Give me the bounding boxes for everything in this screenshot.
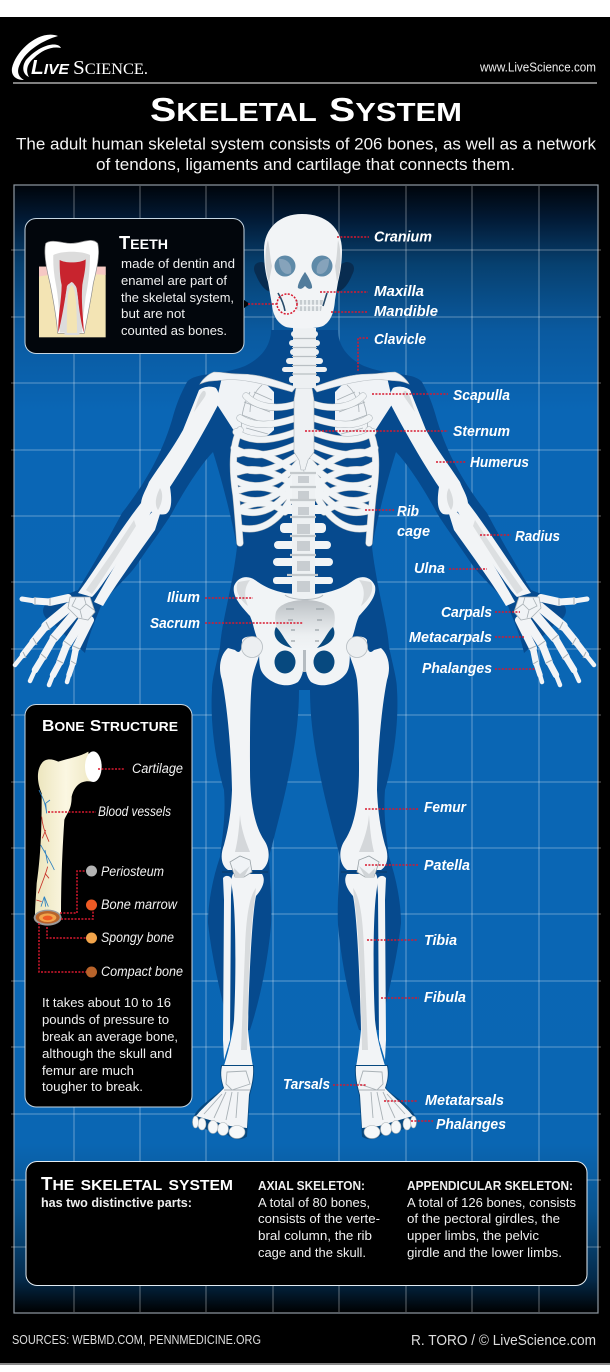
appendicular skeleton text: upper limbs, the pelvic xyxy=(407,1228,540,1243)
credit: R. TORO / © LiveScience.com xyxy=(411,1333,596,1349)
bone structure heading: Bone Structure xyxy=(42,715,178,735)
appendicular skeleton text: girdle and the lower limbs. xyxy=(407,1245,562,1260)
teeth body text: counted as bones. xyxy=(121,323,227,338)
bone illustration xyxy=(34,751,102,926)
bone pressure text: pounds of pressure to xyxy=(42,1012,169,1027)
teeth body text xyxy=(121,256,235,338)
axial skeleton text: consists of the verte- xyxy=(258,1211,380,1226)
bone labels: Sternum xyxy=(453,423,510,440)
axial skeleton text: cage and the skull. xyxy=(258,1245,366,1260)
bone labels: Clavicle xyxy=(374,331,426,348)
axial skeleton text xyxy=(258,1178,380,1260)
bone pressure text: femur are much xyxy=(42,1063,134,1078)
bone pressure text: break an average bone, xyxy=(42,1029,178,1044)
bone pressure text: although the skull and xyxy=(42,1046,172,1061)
teeth body text: enamel are part of xyxy=(121,273,227,288)
bone labels: Mandible xyxy=(374,303,438,320)
right half of skeleton xyxy=(304,372,594,1138)
tooth illustration xyxy=(39,240,106,337)
logo: LiveScience: SCIENCE. xyxy=(73,57,148,79)
teeth body text: the skeletal system, xyxy=(121,290,234,305)
bone labels: Patella xyxy=(424,857,470,874)
panel: bone structure xyxy=(25,704,192,1107)
bone part labels xyxy=(98,761,183,979)
intro text: of tendons, ligaments and cartilage that connects them. xyxy=(96,155,515,174)
bone labels: Phalanges xyxy=(436,1116,506,1133)
bone labels: Femur xyxy=(424,799,467,816)
axial skeleton text: AXIAL SKELETON: xyxy=(258,1178,365,1193)
bone part labels: Cartilage xyxy=(132,761,183,776)
teeth body text: but are not xyxy=(121,306,185,321)
panel: two distinctive parts xyxy=(26,1162,587,1286)
bone labels: cage xyxy=(397,523,430,540)
skeleton xyxy=(15,214,594,1138)
axial skeleton text: bral column, the rib xyxy=(258,1228,372,1243)
bone part labels: Bone marrow xyxy=(101,897,178,912)
sub heading: has two distinctive parts: xyxy=(41,1195,192,1210)
bone labels: Phalanges xyxy=(422,660,492,677)
website url: www.LiveScience.com xyxy=(479,60,596,74)
cervical spine xyxy=(282,328,327,388)
pelvic inlet openings xyxy=(275,627,334,648)
bone part labels: Periosteum xyxy=(101,864,164,879)
bone part labels: Compact bone xyxy=(101,964,183,979)
bone labels: Ilium xyxy=(167,589,200,606)
teeth heading: Teeth xyxy=(119,232,168,254)
bone labels: Ulna xyxy=(414,560,445,577)
leader lines xyxy=(205,237,535,1121)
sternum xyxy=(294,388,314,470)
bone labels: Carpals xyxy=(441,604,492,621)
bone labels: Metatarsals xyxy=(425,1092,504,1109)
teeth xyxy=(295,300,323,311)
logo: LiveScience: LIVE xyxy=(31,57,70,79)
title: Skeletal System xyxy=(150,88,462,129)
legend dots xyxy=(86,866,97,978)
panel: teeth xyxy=(25,218,250,354)
bone part labels: Spongy bone xyxy=(101,930,174,945)
sources: SOURCES: WEBMD.COM, PENNMEDICINE.ORG xyxy=(12,1333,261,1347)
bone pressure text: tougher to break. xyxy=(42,1079,143,1094)
intro text: The adult human skeletal system consists of 206 bones, as well as a network xyxy=(16,134,596,154)
panel: blue anatomy background xyxy=(11,185,601,1313)
bone labels: Sacrum xyxy=(150,615,200,632)
skeletal system heading: The skeletal system xyxy=(41,1170,233,1195)
bone labels: Tarsals xyxy=(283,1076,330,1093)
bone labels: Cranium xyxy=(374,228,432,246)
axial skeleton text: A total of 80 bones, xyxy=(258,1195,370,1210)
teeth pointer with circle xyxy=(248,294,297,314)
bone labels xyxy=(150,228,560,1133)
bone part labels: Blood vessels xyxy=(98,804,171,819)
appendicular skeleton text: A total of 126 bones, consists xyxy=(407,1195,576,1210)
bone labels: Humerus xyxy=(470,454,529,471)
left half of skeleton xyxy=(15,372,305,1138)
bone labels: Maxilla xyxy=(374,283,424,300)
bone labels: Metacarpals xyxy=(409,629,492,646)
lumbar spine xyxy=(273,472,333,600)
appendicular skeleton text: APPENDICULAR SKELETON: xyxy=(407,1178,573,1193)
bone labels: Fibula xyxy=(424,989,466,1006)
nose xyxy=(298,272,312,289)
eye sockets xyxy=(274,256,296,276)
bone labels: Scapulla xyxy=(453,387,510,404)
appendicular skeleton text: of the pectoral girdles, the xyxy=(407,1211,560,1226)
teeth body text: made of dentin and xyxy=(121,256,235,271)
bone labels: Radius xyxy=(515,528,560,545)
appendicular skeleton text xyxy=(407,1178,576,1260)
bone pressure text xyxy=(42,995,178,1094)
sacrum xyxy=(275,600,335,650)
intro text xyxy=(16,134,596,174)
skull xyxy=(264,214,342,328)
bone labels: Rib xyxy=(397,503,419,520)
pubic symphysis xyxy=(303,650,306,672)
bone leader lines xyxy=(39,769,124,972)
bone labels: Tibia xyxy=(424,932,457,949)
bone pressure text: It takes about 10 to 16 xyxy=(42,995,171,1010)
logo: LiveScience xyxy=(12,35,148,80)
sacral foramina xyxy=(286,609,324,641)
body silhouette xyxy=(43,262,566,1030)
